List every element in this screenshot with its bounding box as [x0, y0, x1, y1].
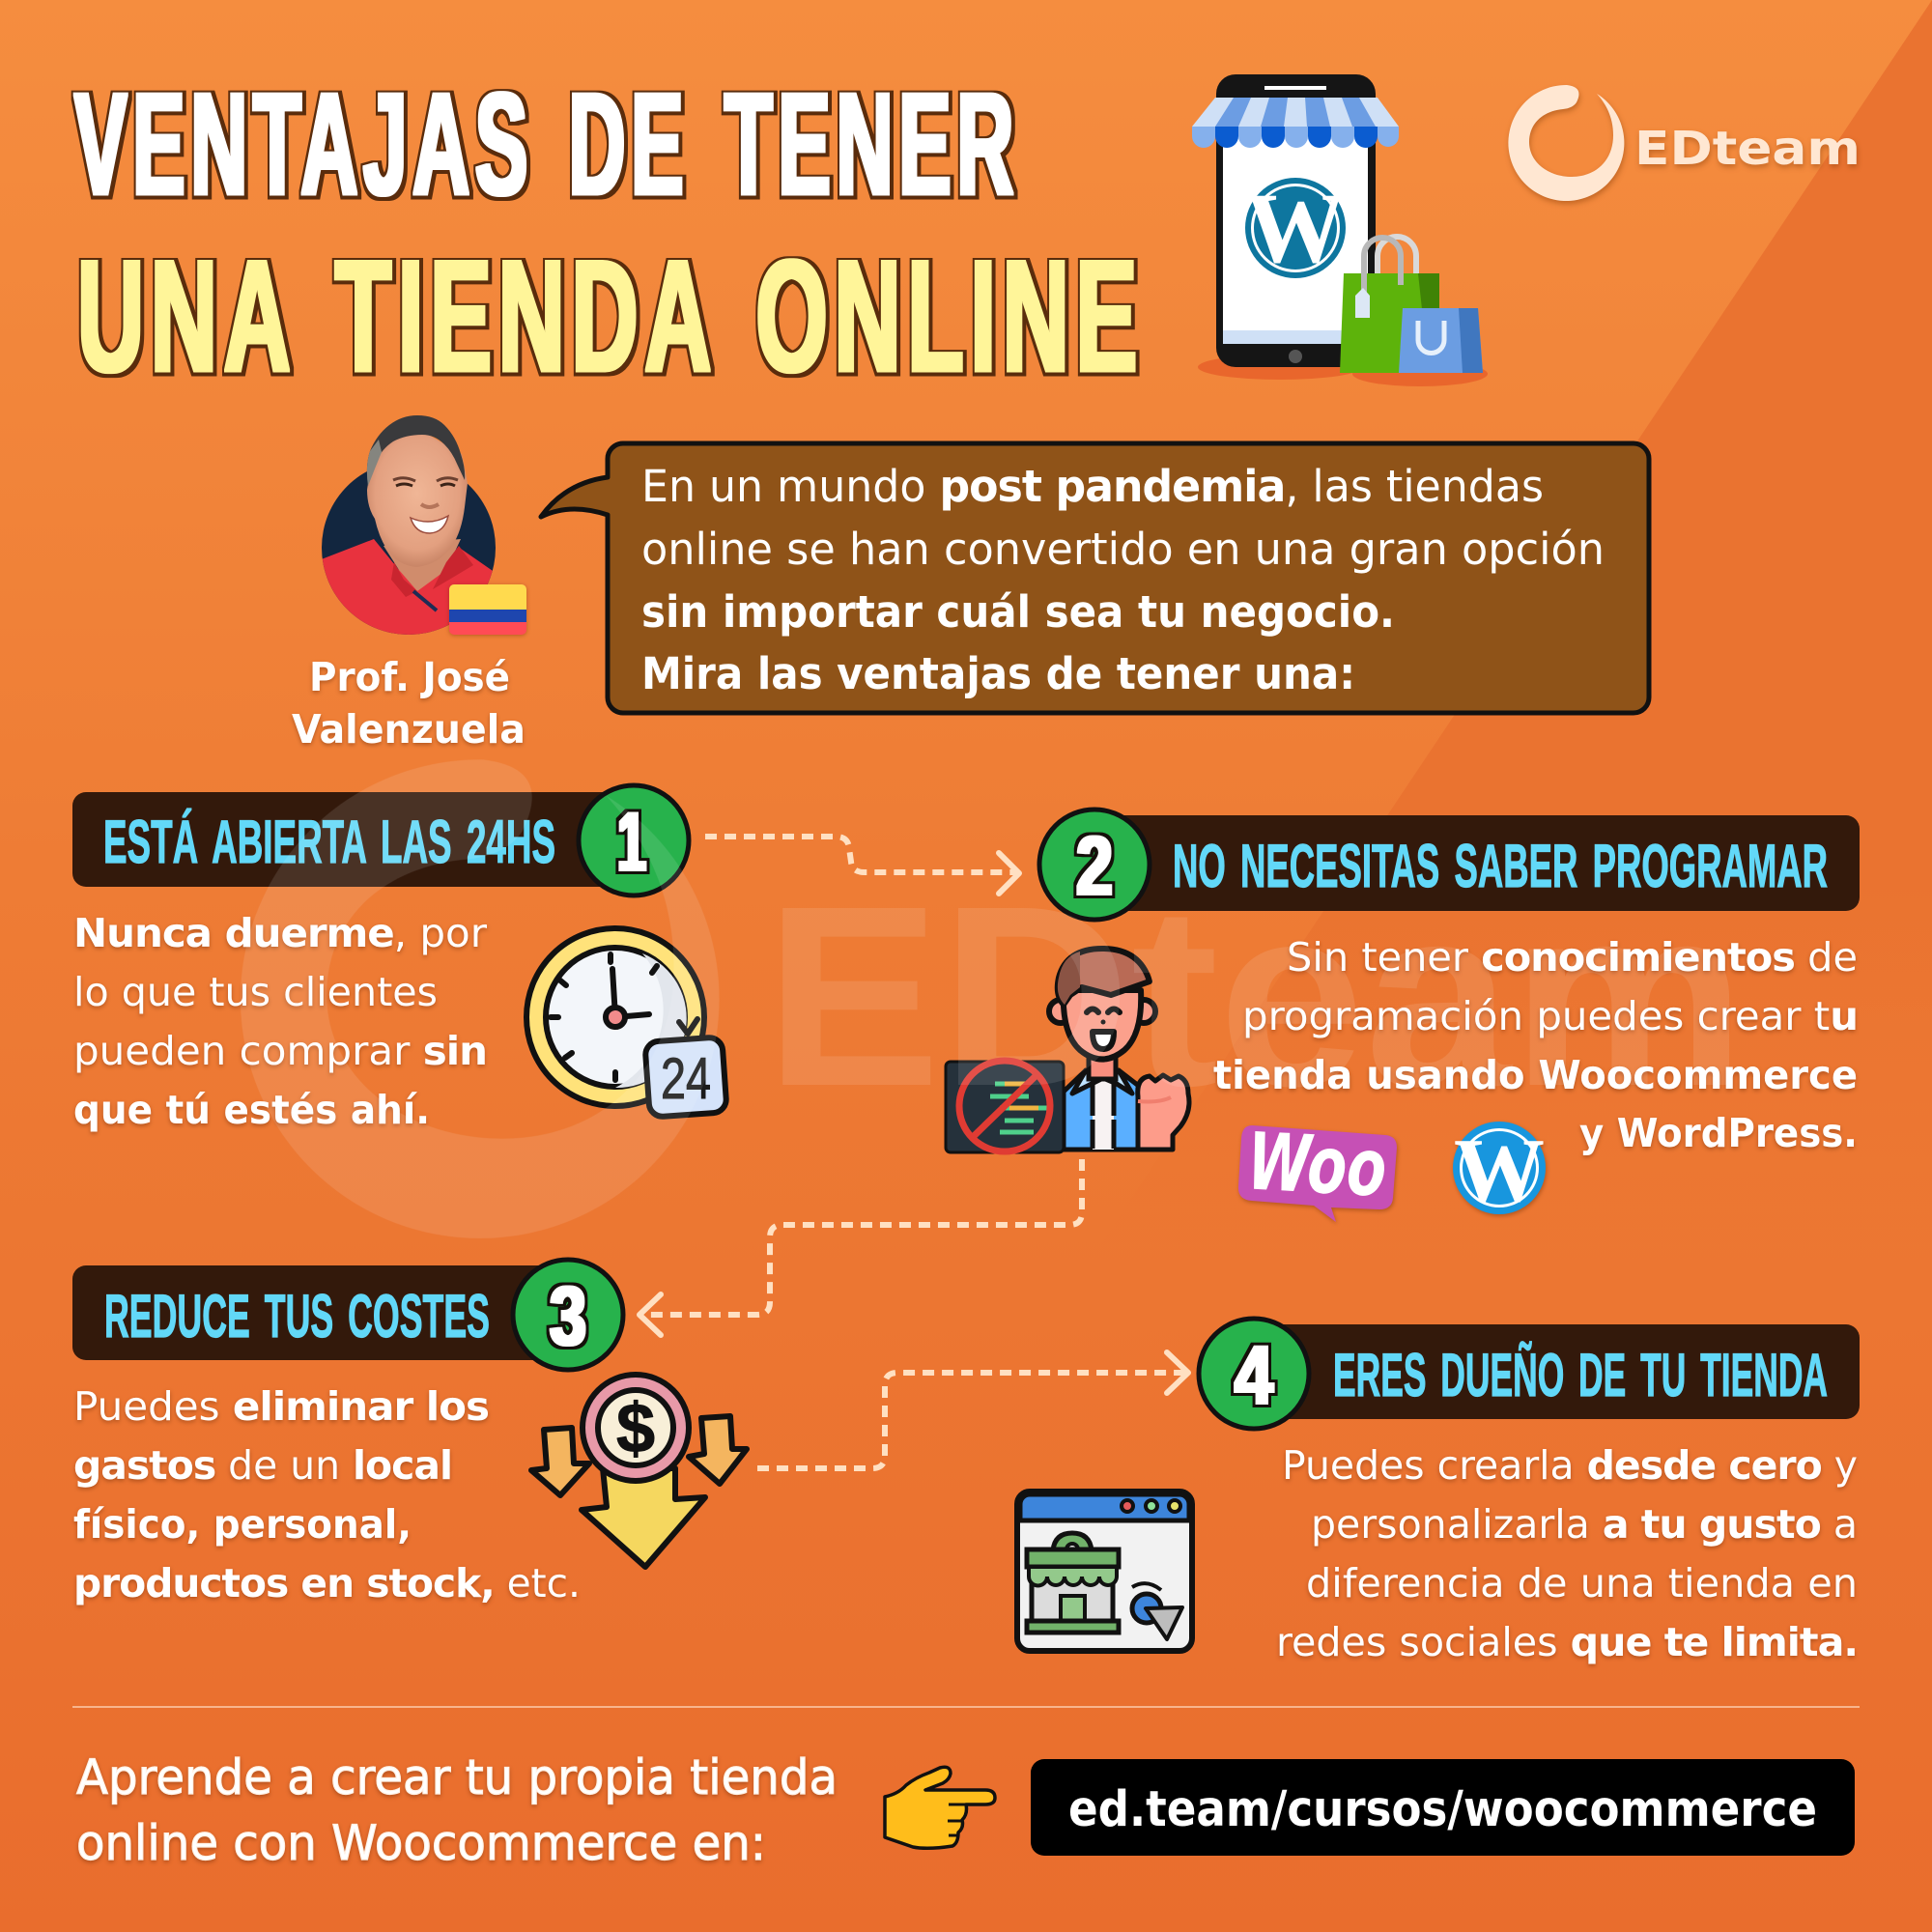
text: step 1: lo que tus clientes — [73, 969, 438, 1015]
text: step 3 — [73, 1383, 581, 1606]
icon: wordpress logo: W — [1454, 1121, 1545, 1221]
text: step 1: Nunca duerme, por — [73, 910, 487, 956]
icon: wordpress logo on phone: W — [1245, 173, 1346, 284]
title — [74, 62, 1144, 405]
icon: clock 24: 24 — [661, 1046, 711, 1111]
heading: step 4 — [1199, 1319, 1860, 1429]
icon: coin and down arrows — [531, 1375, 747, 1567]
icon: phone store with shopping bags — [1192, 74, 1488, 386]
icon: woo logo: Woo — [1245, 1116, 1389, 1215]
text: step 2: programación puedes crear t u — [1242, 993, 1858, 1039]
title line 1: VENTAJAS DE TENER — [74, 62, 1019, 225]
icon: person with blocked code screen — [946, 949, 1189, 1152]
bubble text — [641, 461, 1605, 699]
call to action link — [1031, 1759, 1855, 1856]
panel: step 1 — [72, 785, 727, 1133]
heading: step 3: REDUCE TUS COSTES — [104, 1283, 490, 1350]
arrow: 1 to 2 — [705, 837, 1019, 894]
text: step 1: pueden comprar sin — [73, 1028, 487, 1074]
author name — [292, 654, 526, 753]
call to action text: Aprende a crear tu propia tienda — [76, 1749, 838, 1805]
author name: Prof. José — [309, 654, 510, 700]
text: step 4: personalizarla a tu gusto a — [1311, 1501, 1858, 1548]
speech bubble — [541, 443, 1649, 713]
text: step 2 — [1213, 934, 1858, 1156]
arrow: 3 to 4 — [757, 1352, 1188, 1468]
icon: online shop window — [1017, 1492, 1192, 1651]
text: step 4 — [1276, 1442, 1858, 1665]
heading: step 1: ESTÁ ABIERTA LAS 24HS — [103, 809, 555, 876]
watermark: EDteam — [241, 759, 1746, 1238]
title line 2: UNA TIENDA ONLINE — [77, 227, 1144, 405]
author name: Valenzuela — [292, 706, 526, 753]
panel: author — [292, 415, 526, 753]
bubble text: online se han convertido en una gran opción — [641, 524, 1605, 575]
text: step 3: físico, personal, — [73, 1501, 412, 1548]
watermark: EDteam: EDteam — [765, 853, 1746, 1140]
bubble text: Mira las ventajas de tener una: — [641, 648, 1355, 699]
text: step 2: Sin tener conocimientos de — [1287, 934, 1858, 980]
text: step 2: tienda usando Woocommerce — [1213, 1052, 1858, 1098]
text: step 1 — [73, 910, 487, 1133]
arrow: 2 to 3 — [639, 1159, 1082, 1335]
text: step 4: Puedes crearla desde cero y — [1282, 1442, 1858, 1489]
flag: Colombia — [449, 584, 526, 635]
text: step 4: redes sociales que te limita. — [1276, 1619, 1858, 1665]
call to action text: online con Woocommerce en: — [76, 1815, 766, 1871]
panel: step 3 — [72, 1260, 747, 1606]
call to action text — [76, 1749, 838, 1871]
text: step 2: y WordPress. — [1579, 1110, 1858, 1156]
heading: step 4: 4 — [1235, 1329, 1273, 1422]
logo: EDteam: EDteam — [1634, 122, 1861, 176]
text: step 1: que tú estés ahí. — [73, 1087, 430, 1133]
icon: coin and down arrows: $ — [616, 1390, 655, 1467]
heading: step 3: 3 — [550, 1270, 586, 1363]
heading: step 1: 1 — [617, 796, 646, 889]
logo: EDteam — [1508, 85, 1861, 201]
heading: step 3 — [72, 1260, 623, 1370]
panel: step 4 — [1017, 1319, 1860, 1665]
awning — [1192, 98, 1399, 148]
heading: step 2: 2 — [1076, 820, 1113, 913]
call to action link: ed.team/cursos/woocommerce — [1068, 1781, 1817, 1838]
bubble text: sin importar cuál sea tu negocio. — [641, 586, 1395, 638]
bubble text: En un mundo post pandemia, las tiendas — [641, 461, 1544, 512]
portrait photo — [309, 415, 526, 647]
text: step 3: gastos de un local — [73, 1442, 452, 1489]
icon: clock 24 — [526, 928, 727, 1118]
text: step 3: Puedes eliminar los — [73, 1383, 489, 1430]
text: step 3: productos en stock, etc. — [73, 1560, 581, 1606]
heading: step 1 — [72, 785, 689, 895]
heading: step 2 — [1039, 810, 1860, 920]
text: step 4: diferencia de una tienda en — [1306, 1560, 1858, 1606]
panel: step 2 — [946, 810, 1860, 1222]
icon: pointing hand — [885, 1767, 995, 1848]
